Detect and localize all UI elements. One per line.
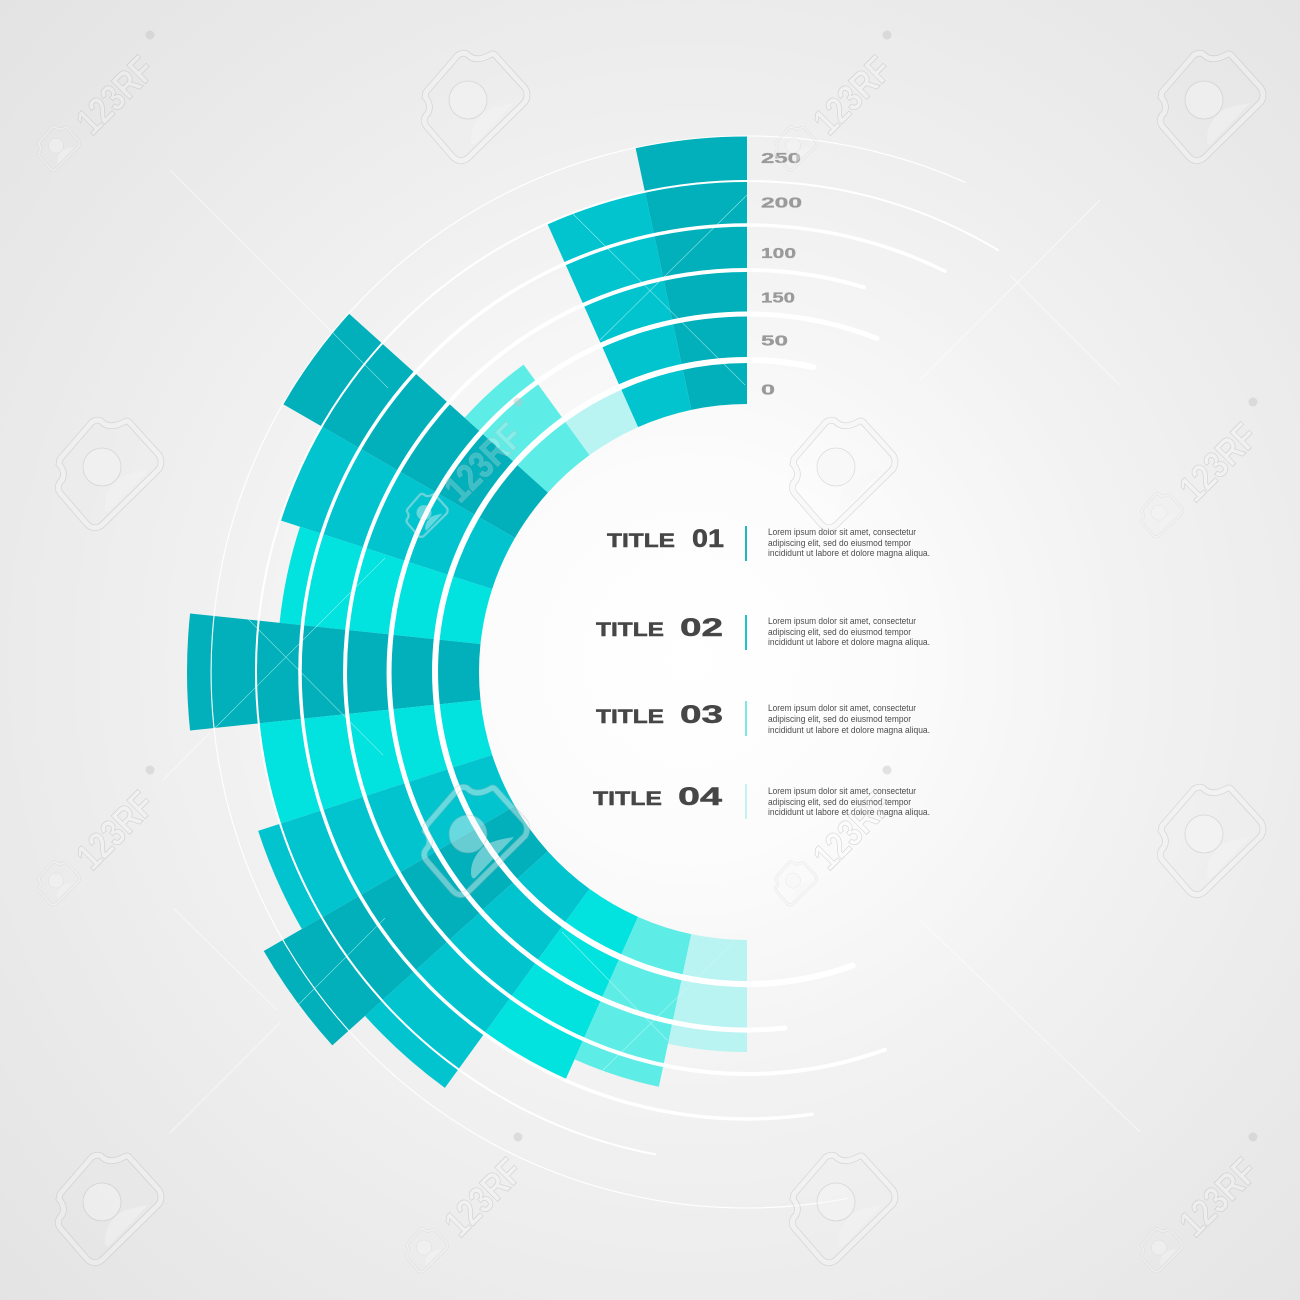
legend item 02 (596, 614, 930, 650)
description 01: adipiscing elit, sed do eiusmod tempor (768, 538, 911, 548)
thin diagonal guide lines (215, 195, 747, 1073)
description 04: incididunt ut labore et dolore magna aliqua. (768, 807, 930, 817)
watermark logo on chart: 123RF (437, 416, 531, 510)
title 04: TITLE (593, 789, 662, 810)
watermark logo bottom right: 123RF (1172, 1151, 1266, 1245)
wedge: 120-132 deg dark (264, 806, 548, 1045)
legend item 03: 03 (680, 701, 723, 729)
axis label 0: 0 (761, 382, 775, 398)
watermark logo centre (775, 766, 900, 905)
watermark logo right: 123RF (1172, 416, 1266, 510)
axis label 50: 50 (761, 332, 788, 350)
axis label 100: 100 (761, 245, 796, 262)
wedge: 0-12 deg dark, value 250 (636, 136, 747, 410)
ring arc r=312 (435, 360, 853, 984)
legend item 04 (593, 783, 930, 819)
wedge: 168-180 deg very light (668, 934, 747, 1052)
ring arc r=358 (389, 314, 877, 1030)
description 04: adipiscing elit, sed do eiusmod tempor (768, 797, 911, 807)
axis label 250: 250 (761, 150, 801, 167)
description 02: adipiscing elit, sed do eiusmod tempor (768, 627, 911, 637)
description 02: incididunt ut labore et dolore magna aliqua. (768, 637, 930, 647)
axis labels (761, 150, 802, 398)
watermark logo on chart (406, 398, 531, 537)
wedge: 144-156 deg bright (484, 889, 638, 1080)
radial chart (187, 136, 747, 1088)
legend item 02: 02 (680, 614, 723, 642)
watermark logo top right: 123RF (806, 49, 900, 143)
watermark logo top right (775, 30, 900, 170)
wedge: 132-144 deg medium (365, 851, 589, 1088)
ring arc r=447 (300, 225, 945, 1119)
wedge: 108-120 deg medium (258, 755, 515, 929)
description 03: incididunt ut labore et dolore magna aliqua. (768, 725, 930, 735)
axis label 200: 200 (761, 194, 802, 212)
description 04: Lorem ipsum dolor sit amet, consectetur (768, 786, 916, 796)
wedge: 12-24 deg medium (547, 192, 691, 427)
watermark logo bottom centre (406, 1132, 531, 1272)
watermark logo left: 123RF (69, 784, 163, 878)
axis label 150: 150 (761, 290, 795, 306)
watermark logo right (1141, 398, 1266, 537)
watermark logo bottom centre: 123RF (437, 1151, 531, 1245)
legend item 03 (596, 701, 930, 736)
ring arc r=402 (345, 270, 885, 1074)
white ring arcs (211, 136, 998, 1208)
wedge: 84-96 deg dark (187, 613, 480, 731)
wedge: 24-36 deg very light (564, 387, 638, 455)
watermark logo centre: 123RF (806, 784, 900, 878)
legend item 01 (607, 525, 930, 561)
faint background construction lines (163, 170, 1140, 1133)
title 03: TITLE (596, 707, 664, 728)
legend item 01: 01 (692, 525, 724, 553)
wedge: 156-168 deg pale (575, 917, 691, 1087)
description 02: Lorem ipsum dolor sit amet, consectetur (768, 616, 916, 626)
watermark logo bottom right (1141, 1132, 1266, 1272)
wedge: 96-108 deg bright (259, 700, 492, 824)
wedge: 36-48 deg pale (465, 365, 589, 493)
description 01 (768, 527, 930, 558)
description 04 (768, 786, 930, 817)
title 02: TITLE (596, 620, 664, 641)
wedge: 48-60 deg dark (283, 313, 548, 538)
wedge: 72-84 deg bright (280, 527, 492, 644)
title 01: TITLE (607, 531, 675, 552)
ring arc r=491 (256, 181, 998, 1154)
watermark logo left (38, 766, 163, 905)
wedge: 60-72 deg medium (280, 426, 515, 589)
legend item 04: 04 (678, 783, 722, 811)
description 03: adipiscing elit, sed do eiusmod tempor (768, 714, 911, 724)
watermark logo top left (38, 30, 163, 170)
description 02 (768, 616, 930, 647)
watermark logo top left: 123RF (69, 49, 163, 143)
description 01: Lorem ipsum dolor sit amet, consectetur (768, 527, 916, 537)
description 03 (768, 703, 930, 735)
ring arc r=536 (211, 136, 965, 1208)
description 01: incididunt ut labore et dolore magna aliqua. (768, 548, 930, 558)
description 03: Lorem ipsum dolor sit amet, consectetur (768, 703, 916, 713)
